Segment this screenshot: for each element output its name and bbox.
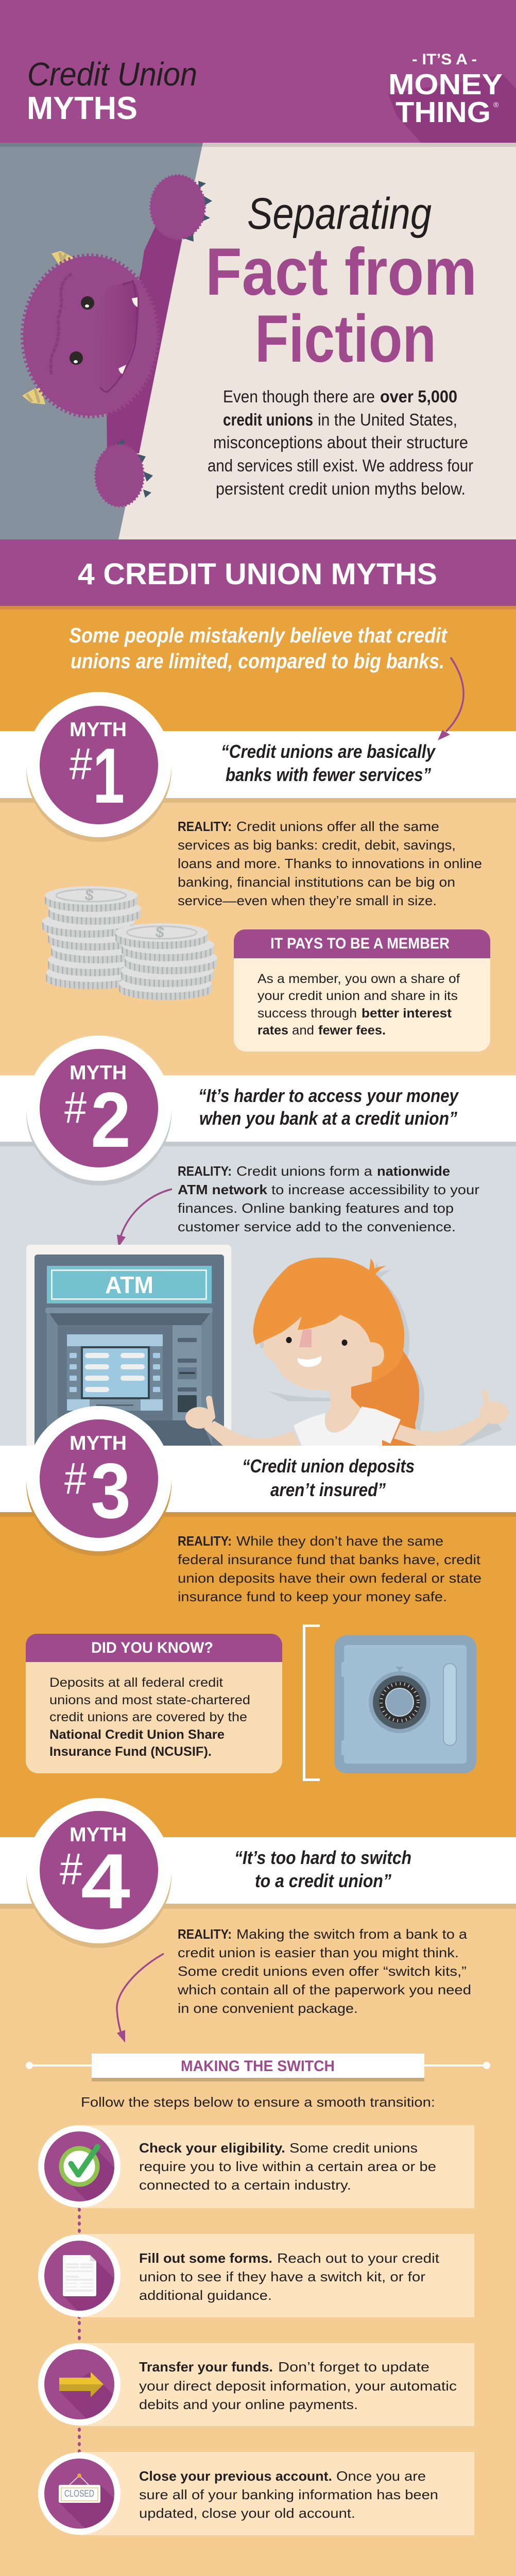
hero heading: Fiction — [255, 301, 436, 376]
quote: myth 2: “It’s harder to access your money — [198, 1085, 459, 1106]
badge: myth 4 — [26, 1798, 171, 1948]
arrow: myth 4 to steps — [117, 1954, 164, 2043]
reality: myth 2: REALITY: — [178, 1163, 232, 1179]
badge: myth 1: # — [70, 739, 92, 789]
icon: check mark — [61, 2147, 97, 2184]
reality: myth 1 — [178, 819, 482, 908]
reality: myth 4: in one convenient package. — [178, 2001, 358, 2016]
reality: myth 4: credit union is easier than you might think. — [178, 1945, 459, 1960]
panel: intro orange — [0, 606, 516, 731]
step 2: fill out some forms — [38, 2234, 474, 2317]
reality: myth 4: REALITY: — [178, 1926, 232, 1942]
text: steps intro: Follow the steps below to ensure a smooth transition: — [81, 2094, 435, 2110]
quote: myth 1: banks with fewer services” — [226, 764, 431, 785]
reality: myth 3: insurance fund to keep your money safe. — [178, 1589, 447, 1604]
callout: did you know: credit unions are covered by the — [49, 1710, 247, 1724]
ear — [370, 1342, 384, 1367]
badge: myth 4: 4 — [81, 1838, 130, 1925]
reality: myth 3: union deposits have their own federal or state — [178, 1570, 481, 1586]
step 1: check your eligibility: Some credit unions — [289, 2140, 418, 2156]
reality: myth 2: finances. Online banking features and top — [178, 1200, 454, 1216]
step 4: close your previous account: updated, close your old account. — [139, 2505, 355, 2521]
hero heading — [205, 189, 477, 376]
badge: myth 3 — [26, 1406, 171, 1556]
icon: coin stacks: $ — [84, 886, 95, 905]
step 2: fill out some forms: additional guidance. — [139, 2287, 272, 2303]
icon: safe — [304, 1626, 476, 1780]
logo: It's a Money Thing — [388, 51, 503, 129]
quote: myth 2: when you bank at a credit union” — [199, 1108, 457, 1129]
reality: myth 2: to increase accessibility to your — [271, 1182, 479, 1197]
logo: It's a Money Thing: - IT’S A - — [412, 51, 477, 68]
icon: ATM: ATM — [105, 1272, 153, 1298]
callout: did you know: Insurance Fund (NCUSIF). — [49, 1744, 212, 1759]
icon: form document — [63, 2255, 96, 2296]
hero paragraph: over 5,000 — [380, 387, 457, 406]
callout: it pays to be a member — [234, 929, 490, 1052]
icon: purple monster — [22, 175, 212, 506]
reality: myth 3: REALITY: — [178, 1533, 232, 1549]
panel: intro orange: unions are limited, compared to big banks. — [71, 649, 444, 673]
badge: myth 4: MYTH — [70, 1824, 127, 1846]
quote: myth 4: “It’s too hard to switch — [234, 1847, 411, 1868]
callout: it pays to be a member: and — [292, 1023, 314, 1038]
banner: 4 credit union myths — [0, 539, 516, 606]
badge: myth 1: 1 — [93, 732, 125, 820]
step 4: close your previous account — [38, 2452, 474, 2535]
quote: myth 3 — [242, 1455, 415, 1500]
neck — [325, 1386, 362, 1432]
quote: myth 3: aren’t insured” — [270, 1479, 386, 1500]
step 2: fill out some forms: union to see if they have a switch kit, or for — [139, 2269, 425, 2284]
badge: myth 1 — [26, 692, 171, 842]
quote: myth 1 — [221, 741, 436, 785]
callout: did you know: Deposits at all federal credit — [49, 1675, 223, 1690]
reality: myth 4: which contain all of the paperwork you need — [177, 1982, 471, 1997]
badge: myth 2: 2 — [91, 1076, 131, 1164]
badge: myth 4: # — [60, 1844, 82, 1894]
step 3: transfer your funds: debits and your online payments. — [139, 2397, 358, 2412]
hero paragraph: credit unions — [223, 410, 313, 429]
hero paragraph: in the United States, — [318, 410, 457, 429]
horn bottom — [22, 386, 45, 404]
step 2: fill out some forms: Fill out some forms. — [139, 2250, 272, 2266]
title: Credit Union Myths — [27, 56, 197, 126]
callout: it pays to be a member: success through — [257, 1006, 357, 1021]
face — [256, 1311, 376, 1390]
step 1: check your eligibility — [38, 2125, 474, 2208]
callout: did you know: DID YOU KNOW? — [91, 1639, 213, 1656]
step 3: transfer your funds: your direct deposit information, your automatic — [139, 2378, 457, 2394]
arrow: myth 2 to ATM — [117, 1189, 172, 1247]
badge: myth 3: 3 — [91, 1447, 131, 1535]
reality: myth 2 — [178, 1163, 479, 1234]
callout: it pays to be a member: better interest — [362, 1006, 452, 1021]
heading: making the switch — [26, 2054, 490, 2081]
badge: myth 2 — [26, 1036, 171, 1185]
quote: myth 4: to a credit union” — [255, 1870, 391, 1891]
reality: myth 4: Some credit unions even offer “switch kits,” — [178, 1963, 467, 1979]
arms — [204, 1421, 300, 1446]
step 2: fill out some forms: Reach out to your credit — [277, 2250, 440, 2266]
icon: closed sign — [59, 2473, 100, 2503]
heading: making the switch: MAKING THE SWITCH — [181, 2058, 335, 2075]
hero paragraph: Even though there are — [223, 387, 375, 406]
step 3: transfer your funds: Transfer your funds. — [139, 2359, 273, 2375]
callout: it pays to be a member: fewer fees. — [318, 1023, 386, 1038]
reality: myth 1: loans and more. Thanks to innovations in online — [178, 856, 482, 871]
thumbs — [185, 1392, 508, 1429]
panel: myth 4 background — [0, 1837, 516, 2576]
paws — [150, 175, 205, 239]
reality: myth 3: While they don’t have the same — [236, 1533, 443, 1549]
shirt — [294, 1406, 401, 1446]
logo: It's a Money Thing: ® — [493, 100, 499, 109]
panel: myth 1 background — [0, 731, 516, 1075]
badge: myth 2: # — [64, 1083, 87, 1132]
arrow: intro to myth 1 — [438, 657, 463, 740]
ponytail — [351, 1350, 419, 1446]
step 3: transfer your funds — [38, 2343, 474, 2426]
reality: myth 1: REALITY: — [178, 819, 232, 834]
banner: 4 credit union myths: 4 CREDIT UNION MYTHS — [78, 557, 437, 591]
panel: myth 3 background — [0, 1446, 516, 1837]
icon: coin stacks — [42, 886, 217, 1000]
callout: it pays to be a member: IT PAYS TO BE A MEMBER — [270, 935, 450, 952]
hero paragraph — [208, 387, 473, 498]
reality: myth 2: customer service add to the convenience. — [178, 1219, 456, 1234]
claws — [183, 181, 212, 242]
hero paragraph: misconceptions about their structure — [213, 433, 468, 452]
reality: myth 4: Making the switch from a bank to a — [236, 1926, 468, 1942]
badge: myth 3: MYTH — [70, 1432, 127, 1454]
reality: myth 1: banking, financial institutions can be big on — [178, 874, 455, 890]
icon: coin stacks: $ — [154, 923, 165, 942]
reality: myth 3: federal insurance fund that banks have, credit — [178, 1552, 481, 1567]
icon: transfer arrow — [59, 2372, 104, 2397]
panel: hero — [0, 143, 516, 539]
reality: myth 1: service—even when they’re small in size. — [178, 893, 437, 908]
nose — [299, 1329, 312, 1347]
reality: myth 1: services as big banks: credit, debit, savings, — [178, 837, 456, 853]
hero paragraph: and services still exist. We address four — [208, 456, 473, 475]
quote: myth 1: “Credit unions are basically — [221, 741, 436, 762]
icon: closed sign: CLOSED — [64, 2488, 94, 2499]
step 3: transfer your funds: Don’t forget to update — [278, 2359, 429, 2375]
badge: myth 2: MYTH — [70, 1062, 127, 1084]
reality: myth 4 — [177, 1926, 471, 2016]
panel: myth 2 background — [0, 1075, 516, 1446]
eyes — [286, 1337, 347, 1346]
quote: myth 4 — [234, 1847, 411, 1891]
hair — [253, 1258, 404, 1382]
step 1: check your eligibility: require you to live within a certain area or be — [139, 2159, 436, 2174]
illustration: girl giving thumbs up — [185, 1258, 508, 1446]
step 4: close your previous account: Once you are — [336, 2468, 426, 2484]
logo: It's a Money Thing: THING — [395, 96, 491, 129]
badge: myth 3: # — [64, 1454, 87, 1503]
quote: myth 2 — [198, 1085, 459, 1129]
reality: myth 2: ATM network — [178, 1182, 268, 1197]
horn top — [51, 251, 74, 270]
reality: myth 3 — [178, 1533, 481, 1604]
panel: intro orange: Some people mistakenly believe that credit — [69, 623, 448, 647]
icon: ATM — [26, 1245, 231, 1446]
hero paragraph: persistent credit union myths below. — [216, 479, 466, 498]
callout: did you know — [26, 1634, 282, 1773]
hero heading: Fact from — [205, 234, 477, 309]
quote: myth 3: “Credit union deposits — [242, 1455, 415, 1477]
badge: myth 1: MYTH — [70, 719, 127, 741]
header background — [0, 0, 516, 143]
logo: It's a Money Thing: MONEY — [388, 68, 503, 101]
reality: myth 2: Credit unions form a — [236, 1163, 373, 1179]
title: Credit Union Myths: MYTHS — [27, 91, 137, 126]
callout: it pays to be a member: As a member, you own a share of — [257, 972, 460, 986]
step 1: check your eligibility: Check your eligibility. — [139, 2140, 285, 2156]
reality: myth 2: nationwide — [377, 1163, 450, 1179]
callout: did you know: National Credit Union Share — [49, 1727, 225, 1742]
title: Credit Union Myths: Credit Union — [27, 56, 197, 93]
step 4: close your previous account: Close your previous account. — [139, 2468, 332, 2484]
callout: it pays to be a member: rates — [257, 1023, 288, 1038]
reality: myth 1: Credit unions offer all the same — [236, 819, 439, 834]
callout: it pays to be a member: your credit union and share in its — [257, 989, 458, 1003]
mouth — [298, 1356, 321, 1367]
step 4: close your previous account: sure all of your banking information has been — [139, 2487, 438, 2502]
connector dots — [78, 2208, 81, 2453]
callout: did you know: unions and most state-chartered — [49, 1693, 250, 1707]
step 1: check your eligibility: connected to a certain industry. — [139, 2177, 351, 2193]
hero heading: Separating — [247, 189, 432, 239]
